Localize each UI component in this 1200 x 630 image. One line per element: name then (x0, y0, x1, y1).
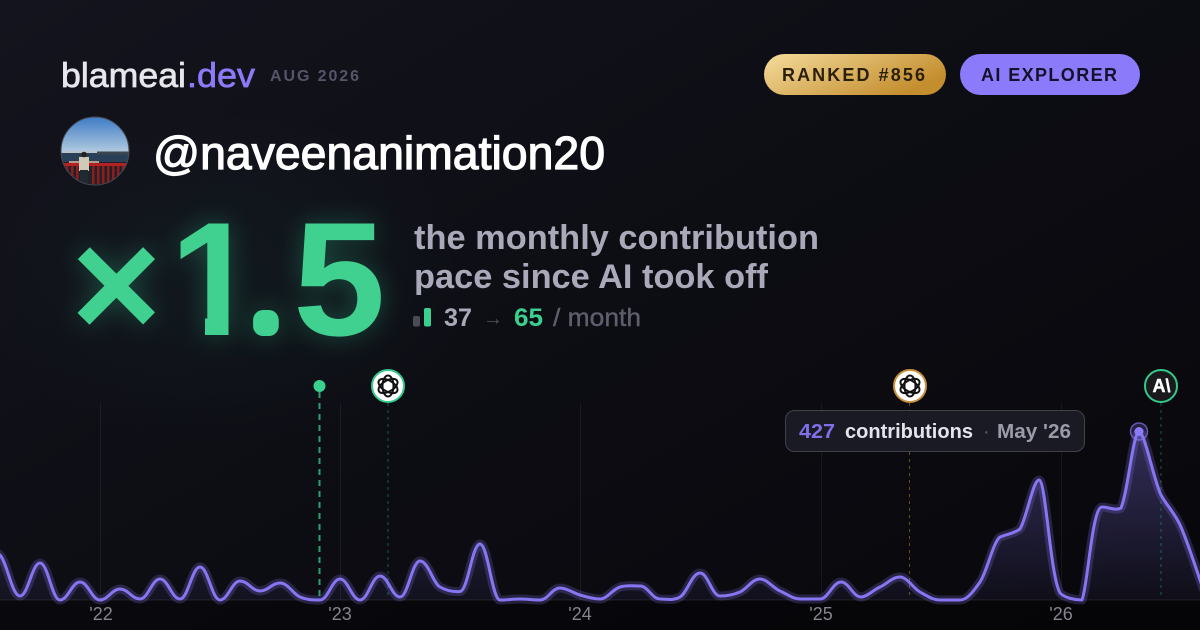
year labels: '25 (809, 604, 833, 624)
multiplier value: . (260, 291, 272, 335)
multiplier value: 1 (170, 189, 260, 370)
pace stat: / month (553, 304, 641, 332)
year labels: '23 (328, 604, 352, 624)
pace stat: 65 (514, 304, 543, 332)
multiplier value: 5 (293, 189, 386, 370)
description: the monthly contribution (414, 219, 819, 257)
tooltip: 427 (799, 421, 835, 443)
headline multiplier (74, 211, 392, 348)
multiplier glow: . (260, 291, 272, 335)
year labels: '22 (89, 604, 113, 624)
multiplier glow: × (71, 198, 162, 370)
year labels: '24 (568, 604, 592, 624)
tooltip: · (983, 421, 990, 443)
description (414, 219, 819, 296)
year labels (89, 604, 1073, 624)
pace stat: 37 (444, 304, 472, 332)
avatar (61, 117, 129, 185)
icon: mini bars (413, 308, 431, 326)
pace stat (413, 304, 641, 332)
peak marker (1130, 423, 1148, 440)
multiplier glow (74, 211, 392, 348)
year labels: '26 (1049, 604, 1073, 624)
badge: ranked: RANKED #856 (782, 65, 925, 85)
badge: ranked (764, 54, 946, 95)
badge: AI explorer (960, 54, 1140, 95)
badge: AI explorer: AI EXPLORER (981, 65, 1117, 85)
AI start marker (314, 380, 326, 600)
contribution line glow (0, 432, 1200, 600)
marker: Anthropic: A\ (1152, 376, 1170, 396)
multiplier glow: 5 (293, 189, 386, 370)
tooltip: May '26 (997, 421, 1071, 443)
brand name: blameai (61, 57, 186, 95)
multiplier glow: 1 (170, 189, 260, 370)
pace stat: → (483, 305, 503, 330)
year grid lines (100, 403, 1062, 600)
multiplier value: × (71, 198, 162, 370)
username: @naveenanimation20 (153, 127, 605, 179)
marker: OpenAI green (372, 370, 404, 597)
brand name (61, 57, 255, 95)
brand header (61, 57, 359, 95)
description: pace since AI took off (414, 258, 769, 296)
area under curve (0, 432, 1200, 600)
chart (0, 370, 1200, 624)
tooltip: contributions (845, 421, 973, 443)
multiplier value (78, 224, 381, 337)
tooltip (786, 410, 1084, 452)
date: AUG 2026 (270, 68, 359, 85)
marker: Anthropic (1145, 370, 1177, 597)
marker: OpenAI gold (894, 370, 926, 597)
brand name: .dev (187, 57, 255, 95)
contribution line (0, 432, 1200, 600)
